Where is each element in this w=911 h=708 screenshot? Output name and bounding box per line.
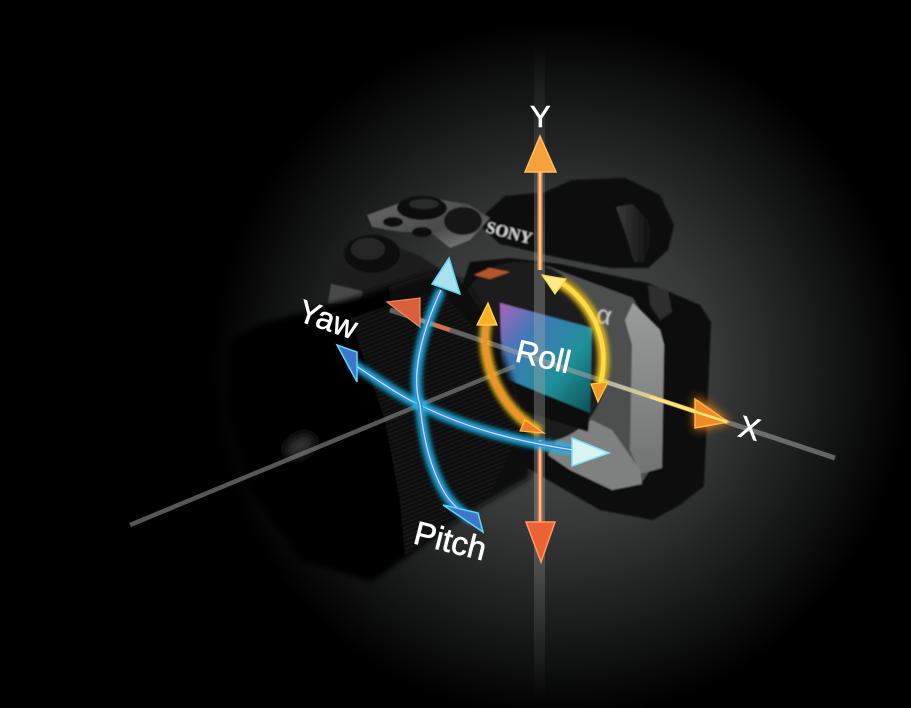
label: Pitch: Pitch [410, 514, 490, 568]
camera: sensor lower electronics [502, 377, 590, 432]
camera: main body black shell [440, 258, 711, 520]
label: Y: Y [530, 99, 551, 134]
camera: lower frame metal [548, 420, 642, 490]
text: SONY logo: SONY [484, 218, 535, 248]
label: X: X [735, 409, 764, 448]
arrow: Pitch (blue curved double arrow) [417, 258, 483, 532]
camera: translucent body chassis [478, 266, 650, 485]
guide: vertical Y line [534, 40, 545, 700]
arrow: Y axis (vertical orange double arrow) [525, 136, 556, 562]
camera: orange mount detail [474, 268, 510, 279]
camera: viewfinder and top hump [476, 178, 674, 268]
arrow: Roll (yellow-orange curved double arrows) [477, 275, 608, 433]
text: alpha badge: α [594, 299, 615, 331]
label: Yaw: Yaw [294, 293, 363, 346]
camera illustration [228, 178, 711, 582]
arrow: Yaw (blue curved double arrow) [337, 345, 609, 466]
camera: front lens highlight [281, 429, 319, 463]
camera: image sensor [500, 303, 592, 413]
camera: eyepiece [616, 204, 652, 262]
axis guide lines [130, 40, 835, 700]
camera: shutter dial shoulder [327, 235, 445, 304]
camera: lens mount ring [427, 240, 633, 464]
camera: upper right detail [648, 285, 672, 320]
guide: line along X axis [390, 310, 835, 458]
camera: dark lens barrel [228, 273, 530, 582]
arrow: X axis (horizontal orange double arrow) [387, 298, 730, 430]
camera: top plate dials [367, 196, 490, 248]
guide: line along lens axis [130, 366, 515, 525]
camera: ribbed focus ring [350, 290, 520, 555]
label: Roll: Roll [512, 333, 574, 380]
camera: grip metal frame [625, 303, 664, 474]
